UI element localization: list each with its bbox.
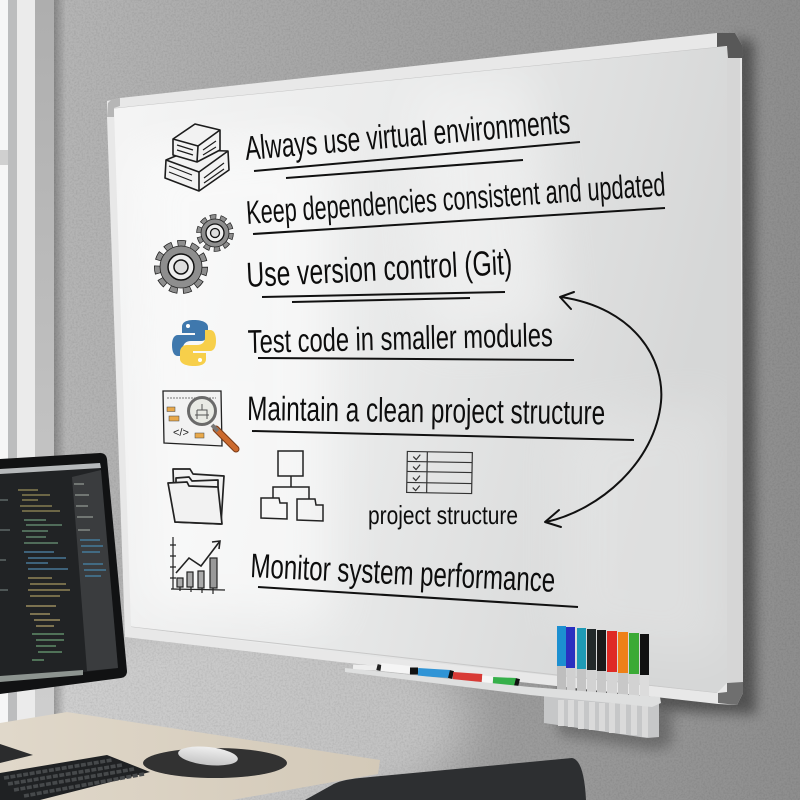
icon: code review with magnifier: </>: [173, 427, 189, 439]
monitor stand foot: [0, 744, 33, 763]
icon: org chart: [261, 451, 323, 521]
marker bank: [557, 626, 649, 701]
right frame side: [727, 47, 743, 693]
board shadow on wall: [560, 36, 756, 714]
marker tray: [345, 626, 672, 750]
label: project structure: project structure: [368, 500, 518, 530]
monitor screen: [0, 463, 118, 682]
icon: checklist table: [407, 451, 472, 494]
icon: server stack: [165, 124, 229, 191]
icon: folder: [168, 469, 224, 524]
text: Always use virtual environments: Always use virtual environments: [243, 103, 572, 168]
code lines: [0, 484, 106, 660]
text: Test code in smaller modules: Test code in smaller modules: [247, 316, 553, 360]
text: Maintain a clean project structure: Maintain a clean project structure: [247, 390, 605, 432]
top left corner cap: [107, 98, 120, 117]
holder shadow: [555, 710, 672, 750]
text: Always use virtual environments: [243, 103, 580, 178]
icon: code review with magnifier: [163, 391, 236, 449]
monitor bezel: [0, 453, 127, 694]
desk: [0, 712, 380, 800]
text: Use version control (Git): Use version control (Git): [245, 243, 513, 295]
computer monitor: [0, 453, 127, 694]
tray pens: [353, 667, 519, 683]
top right corner cap: [717, 33, 742, 58]
whiteboard: [107, 33, 743, 705]
icon: python logo: [172, 320, 216, 366]
board reflections: [114, 47, 720, 693]
bottom right corner cap: [718, 682, 743, 705]
text: Monitor system performance: Monitor system performance: [250, 547, 556, 600]
text: Keep dependencies consistent and updated: [245, 166, 667, 234]
icon: gears: [158, 218, 230, 290]
small gear: [200, 218, 230, 248]
office chair: [305, 758, 586, 800]
board surface: [114, 47, 727, 693]
curved double arrow: [545, 292, 661, 527]
large gear: [158, 244, 204, 290]
mouse: [177, 744, 239, 768]
mouse pad: [143, 748, 287, 778]
tray holder: [544, 696, 659, 738]
text: Use version control (Git): [245, 243, 513, 302]
keyboard: [0, 755, 150, 800]
window at left edge: [0, 0, 54, 800]
tray ledge: [345, 668, 661, 707]
board frame: [107, 33, 743, 705]
icon: growth chart: [170, 537, 225, 594]
